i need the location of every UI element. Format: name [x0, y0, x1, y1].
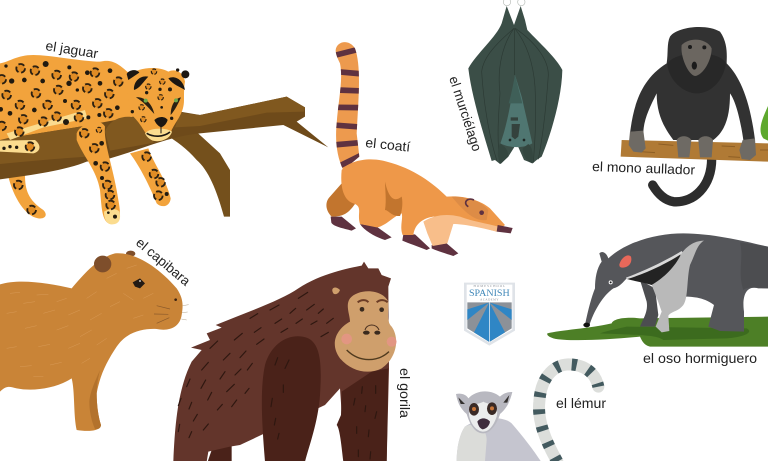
animal: capybara: [0, 251, 189, 431]
leaf: [761, 106, 768, 141]
bat face and chest: [498, 75, 533, 164]
monkey body: [630, 27, 755, 140]
label: el capibara: el capibara: [133, 235, 194, 289]
lemur tail: [539, 364, 598, 461]
jaguar head shape: [127, 68, 185, 141]
logo: Homeschool Spanish Academy: SPANISH: [469, 288, 510, 298]
animal: howler monkey: [621, 27, 768, 202]
label: el murcielago: el murciélago: [446, 74, 485, 153]
lemur body: [457, 418, 541, 461]
label: el mono aullador: el mono aullador: [592, 159, 696, 178]
capybara body: [0, 253, 183, 431]
label: el oso hormiguero: el oso hormiguero: [643, 351, 757, 366]
logo: Homeschool Spanish Academy: [464, 283, 515, 346]
gorilla fur marks: [178, 292, 377, 459]
monkey hands: [629, 131, 756, 160]
tree branch: [0, 97, 328, 217]
label: el jaguar: el jaguar: [45, 38, 100, 61]
logo: Homeschool Spanish Academy: HOMESCHOOL: [473, 284, 505, 288]
gorilla body: [173, 262, 391, 461]
capybara fur: [7, 265, 153, 377]
animal: coati: [326, 42, 513, 256]
lemur head: [456, 391, 512, 433]
label: el gorila: el gorila: [397, 368, 412, 419]
gorilla back leg: [208, 443, 232, 461]
anteater stripe and chest: [626, 241, 704, 332]
grass: [547, 317, 768, 347]
gorilla arms: [262, 336, 388, 461]
jaguar face: [127, 68, 189, 141]
animal: anteater: [547, 233, 768, 347]
anteater body: [585, 233, 768, 332]
coati throat: [423, 215, 498, 246]
monkey tail: [653, 158, 712, 202]
jaguar spots: [0, 61, 173, 219]
logo: Homeschool Spanish Academy: ACADEMY: [480, 297, 499, 301]
coati tail: [336, 42, 360, 169]
gorilla face: [335, 291, 397, 372]
animal: jaguar on branch: [0, 55, 328, 224]
anteater ear patch: [619, 255, 631, 268]
animal: bat: [468, 0, 562, 164]
animal: gorilla: [173, 262, 397, 461]
label: el lemur: el lémur: [556, 396, 607, 411]
jaguar body: [0, 55, 140, 153]
bat wings: [468, 6, 562, 164]
wooden branch: [621, 140, 768, 162]
coati body: [341, 159, 505, 235]
monkey face: [681, 40, 712, 76]
animal: ring-tailed lemur: [456, 364, 598, 461]
label: el coati: el coatí: [365, 135, 411, 155]
